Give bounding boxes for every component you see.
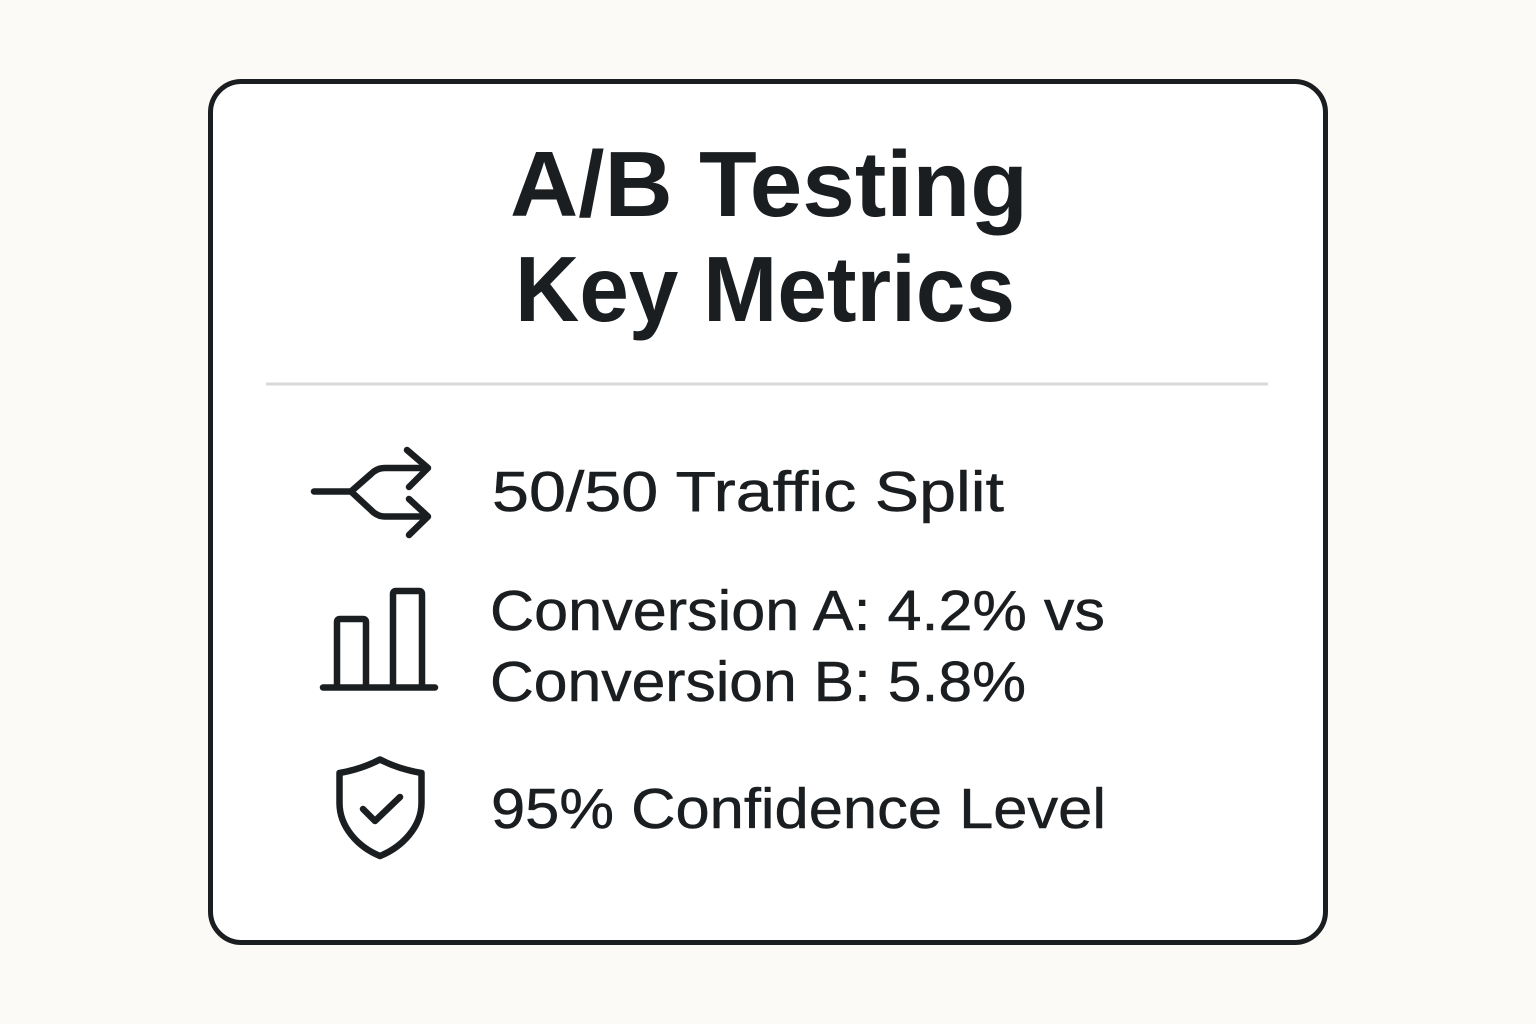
text: confidence level: 95% Confidence Level	[491, 777, 1106, 841]
text: conversion rates: Conversion B: 5.8%	[490, 650, 1026, 714]
title: A/B Testing	[510, 132, 1028, 236]
text: traffic split: 50/50 Traffic Split	[492, 460, 1004, 524]
icon: traffic split arrows	[314, 450, 428, 535]
icon: shield with check	[340, 760, 422, 856]
text: conversion rates	[490, 579, 1105, 714]
icon: bar chart	[323, 591, 435, 688]
title: Key Metrics	[515, 237, 1015, 341]
title	[510, 132, 1028, 341]
text: conversion rates: Conversion A: 4.2% vs	[490, 579, 1105, 643]
panel: key metrics card	[210, 82, 1326, 942]
